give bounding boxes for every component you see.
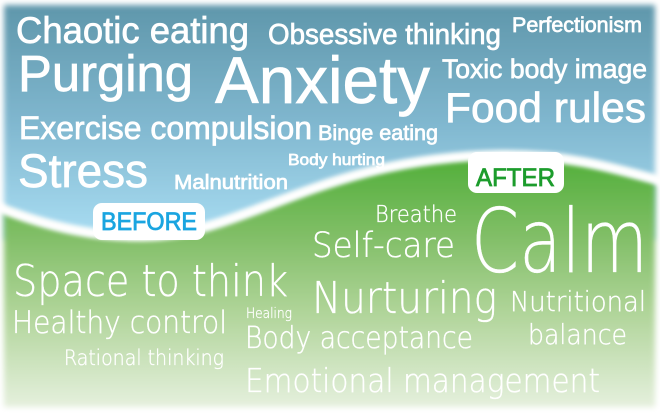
word: Body hurting: Body hurting (288, 152, 385, 169)
before words (16, 10, 647, 197)
word: Stress: Stress (18, 144, 148, 197)
word: Emotional management: Emotional management (245, 361, 600, 400)
word: Nurturing: Nurturing (312, 273, 497, 324)
word: Exercise compulsion: Exercise compulsion (19, 110, 312, 146)
word: Healthy control: Healthy control (12, 305, 227, 341)
label: BEFORE (93, 203, 205, 240)
word: Obsessive thinking: Obsessive thinking (268, 19, 501, 51)
word: Perfectionism: Perfectionism (512, 14, 642, 37)
divider wave (0, 155, 660, 236)
word: Anxiety: Anxiety (215, 43, 430, 117)
word: Space to think: Space to think (13, 256, 288, 307)
word: balance: balance (528, 318, 627, 351)
label: AFTER: AFTER (476, 164, 555, 192)
word: Binge eating: Binge eating (318, 122, 438, 145)
label: BEFORE: BEFORE (101, 208, 197, 236)
after words (12, 190, 648, 400)
word: Malnutrition: Malnutrition (174, 172, 288, 194)
label: AFTER (468, 152, 564, 193)
word: Purging: Purging (18, 45, 193, 102)
panel: before sky (4, 5, 655, 240)
word: Nutritional: Nutritional (510, 285, 646, 318)
word: Breathe: Breathe (375, 202, 457, 228)
word: Body acceptance: Body acceptance (245, 321, 473, 356)
word: Self-care: Self-care (312, 226, 455, 266)
word: Healing: Healing (246, 306, 292, 322)
word: Chaotic eating: Chaotic eating (16, 10, 249, 51)
word: Food rules: Food rules (445, 84, 646, 131)
panel: after meadow (4, 156, 655, 407)
word: Rational thinking: Rational thinking (64, 346, 224, 370)
word: Toxic body image: Toxic body image (442, 54, 647, 84)
